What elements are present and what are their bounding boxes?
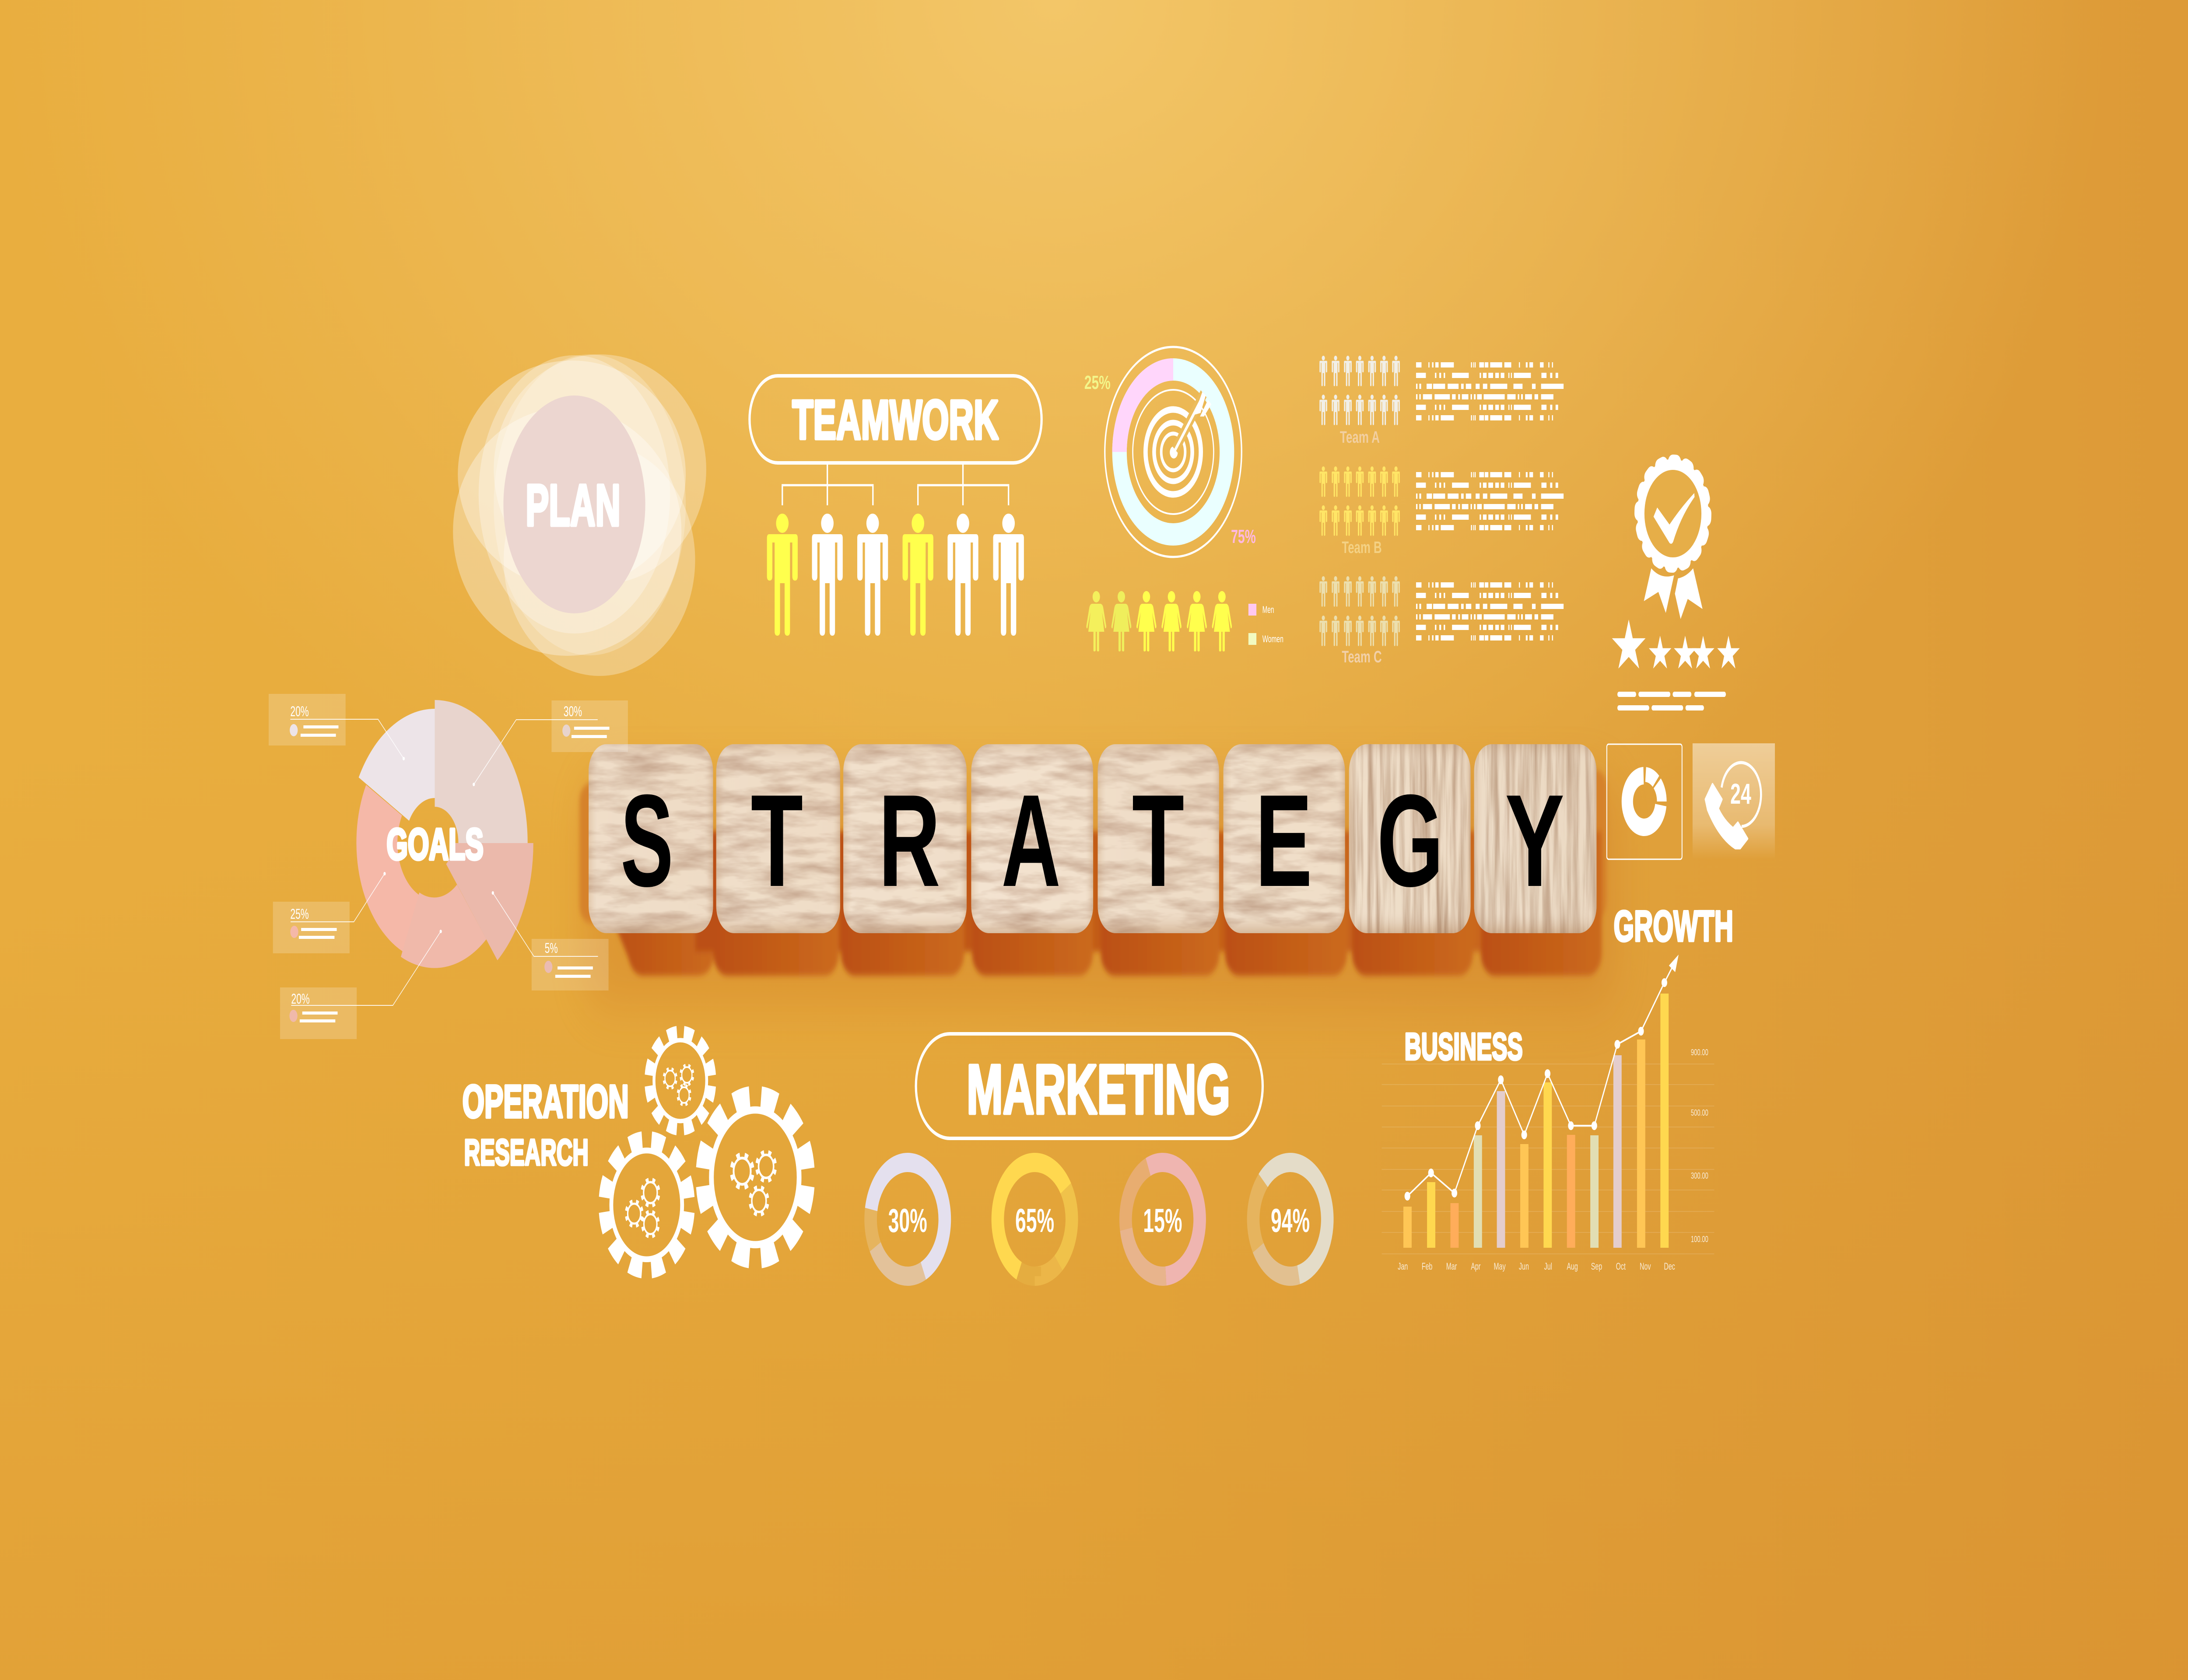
y axis labels: 500.00 [1691, 1108, 1708, 1118]
donut: 30 percent: 30% [888, 1202, 927, 1239]
heading: growth: GROWTH [1613, 902, 1733, 950]
x axis months: Sep [1591, 1261, 1602, 1272]
teamwork pill [750, 376, 1041, 463]
panel: team A [1319, 356, 1564, 446]
x axis months: Aug [1567, 1261, 1578, 1272]
word: strategy letters: G [1377, 767, 1444, 914]
callout: 25 percent [273, 872, 386, 953]
x axis months: Dec [1664, 1261, 1675, 1272]
wood grain straight [1349, 744, 1596, 933]
callout: 20 percent bottom [280, 930, 442, 1039]
block: Y [1474, 744, 1596, 933]
pictogram: team B people [1319, 466, 1400, 536]
redacted text lines B [1416, 475, 1564, 528]
heading: business: BUSINESS [1405, 1026, 1523, 1068]
donut: 94 percent [1238, 1139, 1343, 1300]
icon: gears [604, 1032, 808, 1270]
callout: 20 percent top [269, 694, 405, 760]
heading: operation: OPERATION [463, 1075, 629, 1127]
panel: plan bubbles [453, 354, 706, 676]
icon: award rosette [1637, 459, 1708, 619]
block: A [971, 744, 1093, 933]
block: E [1224, 744, 1345, 933]
heading: research: RESEARCH [464, 1132, 589, 1173]
icon box: 24 hour phone [1693, 743, 1775, 859]
sector: 30 percent [435, 700, 528, 843]
icon: bullseye with arrow [1146, 392, 1211, 494]
text: team A label: Team A [1340, 428, 1380, 446]
text: team B label: Team B [1342, 538, 1382, 556]
x axis months: Jul [1544, 1261, 1552, 1272]
sector: 5 percent [446, 843, 533, 960]
icon box: 24 hour phone: 24 [1730, 778, 1751, 810]
y axis labels: 300.00 [1691, 1171, 1708, 1181]
bars [1403, 994, 1669, 1248]
word: strategy letters: T [1132, 767, 1184, 914]
donut: 15 percent [1114, 1145, 1211, 1294]
callout: 30 percent [473, 700, 628, 786]
panel: team C [1319, 576, 1564, 666]
x axis months [1398, 1261, 1675, 1272]
word: strategy letters: T [751, 767, 803, 914]
75 percent ring [1119, 369, 1227, 535]
word: strategy letters [621, 767, 1564, 914]
y axis labels [1691, 1047, 1708, 1244]
legend: men and women: Women [1262, 634, 1283, 644]
word: strategy letters: E [1255, 767, 1312, 914]
y axis labels: 900.00 [1691, 1047, 1708, 1057]
label 75 percent: 75% [1231, 525, 1256, 547]
callout: 5 percent [492, 891, 609, 990]
x axis months: Apr [1471, 1261, 1481, 1272]
panel: marketing [916, 1034, 1262, 1138]
heading: plan: PLAN [526, 472, 621, 538]
pictogram: team A people [1319, 356, 1400, 425]
callout: 30 percent: 30% [564, 704, 582, 719]
panel: teamwork [750, 376, 1041, 636]
panel: business chart [1382, 955, 1714, 1272]
rating stars [1612, 620, 1740, 668]
icon box: donut chart [1607, 744, 1682, 859]
callout: 20 percent bottom: 20% [291, 991, 310, 1007]
block: R [843, 744, 967, 933]
donut: 65 percent [982, 1139, 1087, 1299]
panel: strategy wooden blocks [589, 744, 1596, 933]
block shadows soft [584, 779, 1615, 1006]
panel: target chart [1084, 347, 1256, 557]
x axis months: Nov [1640, 1261, 1651, 1272]
sector: 20 percent top [359, 709, 435, 821]
org connectors [782, 465, 1009, 505]
sector: 25 percent [356, 785, 419, 952]
heading: teamwork: TEAMWORK [792, 389, 999, 451]
word: strategy letters: Y [1505, 767, 1564, 914]
x axis months: Feb [1422, 1261, 1432, 1272]
word: strategy letters: S [621, 767, 673, 914]
redacted text lines A [1416, 365, 1564, 418]
x axis months: Jan [1398, 1261, 1408, 1272]
label 25 percent: 25% [1084, 371, 1111, 393]
marketing pill [916, 1034, 1262, 1138]
block side shadow [579, 770, 1607, 923]
heading: marketing: MARKETING [967, 1050, 1230, 1128]
wood grain marble [589, 744, 1345, 933]
callout: 25 percent: 25% [290, 906, 309, 922]
donut: 65 percent: 65% [1015, 1202, 1054, 1239]
x axis months: Mar [1446, 1261, 1457, 1272]
callout: 5 percent: 5% [545, 941, 558, 956]
block: G [1349, 744, 1471, 933]
donut: 15 percent: 15% [1143, 1202, 1182, 1239]
sector: 20 percent bottom [401, 885, 486, 968]
x axis months: May [1494, 1261, 1506, 1272]
text: team C label: Team C [1342, 648, 1382, 666]
25 percent ring segment [1119, 369, 1173, 452]
legend: men and women [1248, 604, 1283, 645]
panel: team B [1319, 466, 1564, 556]
plan centre circle [503, 396, 645, 613]
rating text lines [1617, 692, 1726, 710]
x axis months: Oct [1616, 1261, 1626, 1272]
donut: 94 percent: 94% [1271, 1202, 1310, 1239]
redacted text lines C [1416, 585, 1564, 638]
trend line with arrow [1405, 955, 1679, 1200]
donut: 30 percent [857, 1141, 958, 1297]
word: strategy letters: R [879, 767, 940, 914]
pictogram: team C people [1319, 576, 1400, 646]
legend: men and women: Men [1262, 604, 1274, 615]
block: T second [1098, 744, 1219, 933]
pictogram: women row [1086, 591, 1232, 651]
block: T [716, 744, 840, 933]
heading: goals: GOALS [386, 820, 484, 868]
x axis months: Jun [1519, 1261, 1529, 1272]
y axis labels: 100.00 [1691, 1234, 1708, 1244]
callout: 20 percent top: 20% [290, 704, 309, 719]
people row [767, 514, 1024, 636]
panel: goals chart [356, 700, 533, 968]
block: S [589, 744, 713, 933]
word: strategy letters: A [1001, 767, 1061, 914]
block shadows [613, 831, 1602, 976]
